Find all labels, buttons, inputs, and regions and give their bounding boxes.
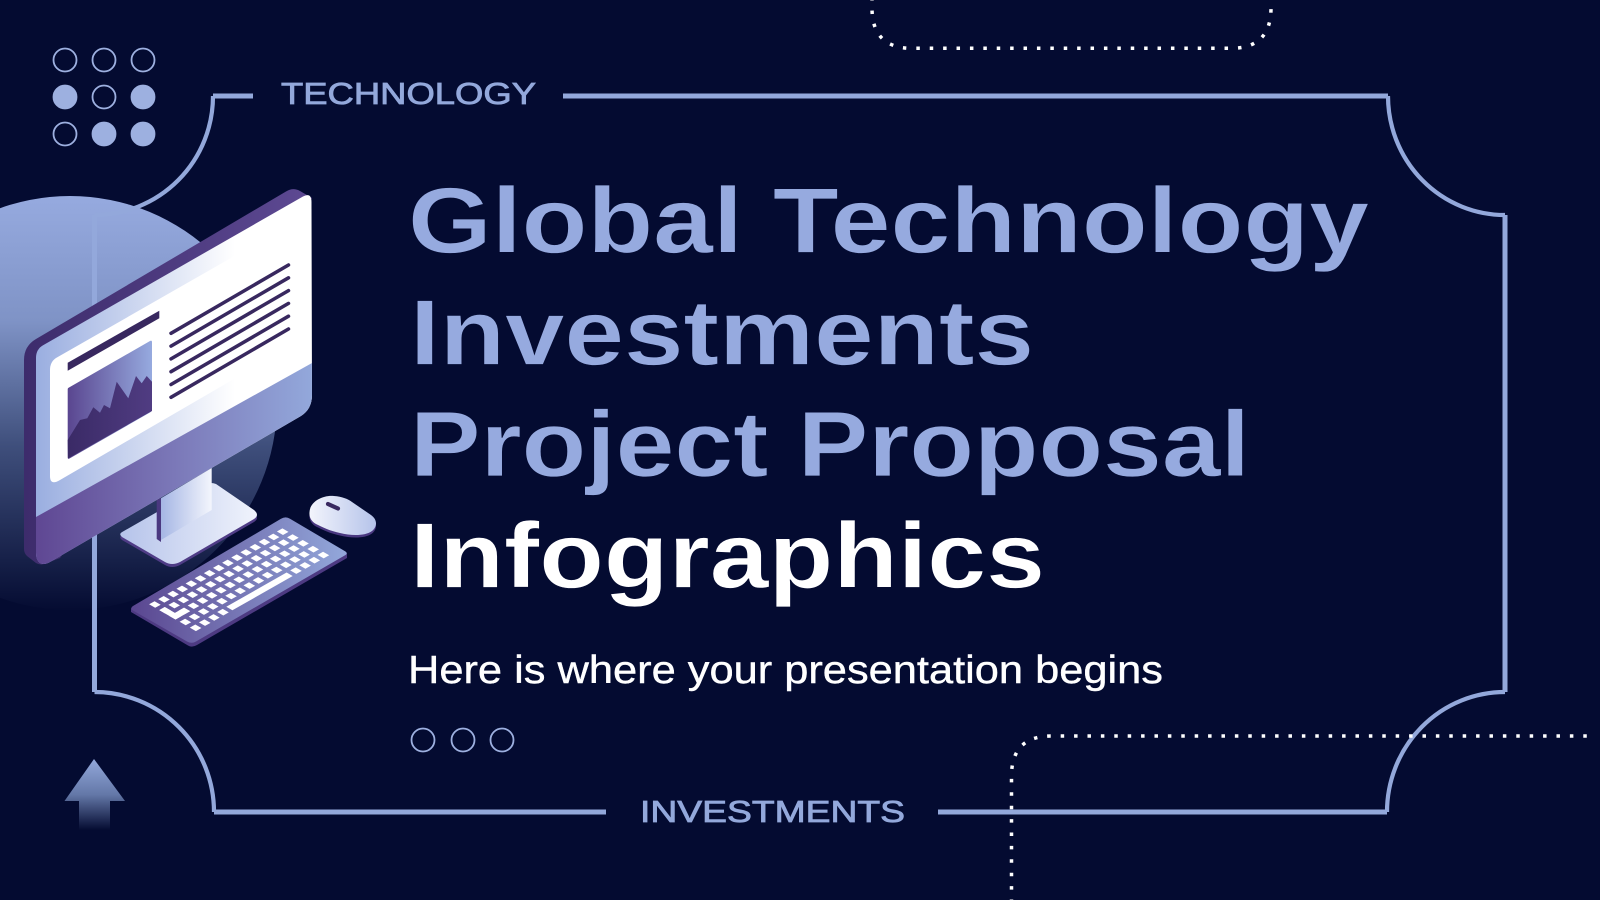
title: Investments [410, 280, 1034, 384]
three outline circles [412, 728, 514, 752]
screen title bar [68, 311, 159, 371]
monitor back [24, 189, 312, 564]
label: TECHNOLOGY: TECHNOLOGY [281, 76, 536, 111]
subtitle: Here is where your presentation begins [408, 649, 1163, 692]
dot grid icon [54, 48, 154, 146]
title: Infographics [410, 504, 1045, 608]
screen text lines [171, 265, 288, 397]
screen panel [50, 221, 302, 482]
dotted line: top [872, 0, 1271, 48]
monitor stand neck [157, 468, 212, 542]
decorative frame [94, 96, 1505, 812]
dotted line: bottom right [1012, 736, 1592, 900]
gradient circle behind monitor [0, 196, 277, 610]
title: Global Technology [408, 169, 1369, 273]
icon: up arrow [64, 759, 125, 830]
screen area chart [68, 341, 152, 459]
monitor stand base [120, 483, 257, 567]
title: Project Proposal [410, 392, 1250, 496]
label: INVESTMENTS: INVESTMENTS [640, 794, 905, 829]
keyboard [131, 517, 347, 647]
monitor front [36, 195, 312, 564]
illustration: desktop computer [24, 185, 376, 647]
keyboard keys [149, 528, 329, 631]
title [408, 169, 1369, 607]
mouse [309, 496, 376, 538]
